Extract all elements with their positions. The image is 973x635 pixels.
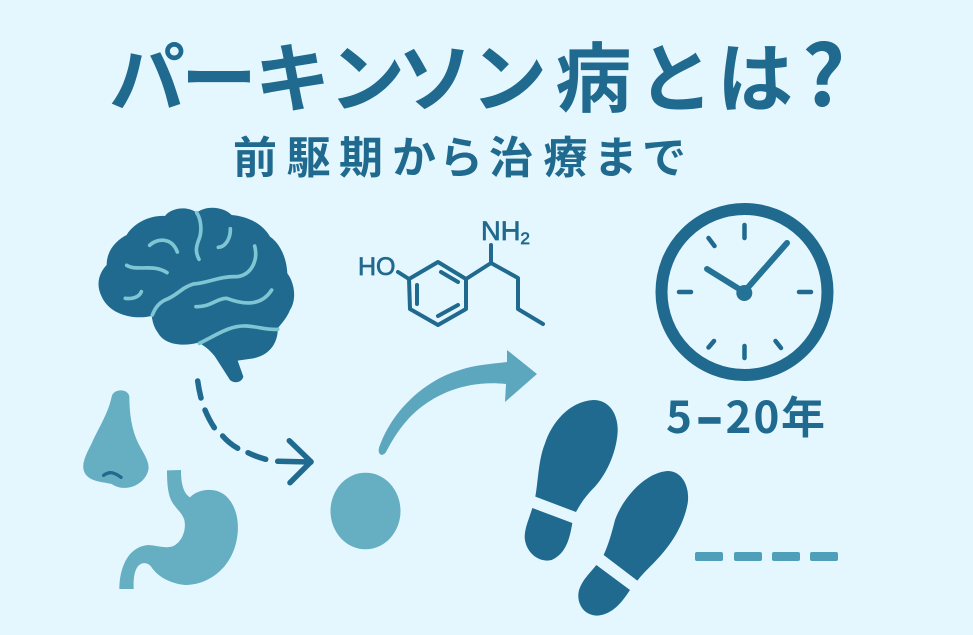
label: HO: HO [358, 253, 396, 281]
arrow: dashed curve from brain [198, 381, 311, 483]
title: ? [802, 10, 845, 131]
right heel [578, 565, 630, 616]
icon: footprints [525, 400, 688, 616]
title: パーキンソン 病とは [109, 18, 793, 128]
label: 5-20 years: 5–20年 [666, 382, 825, 446]
icon: brain [99, 208, 294, 382]
arrow: curved rising [379, 350, 537, 455]
circle: dopamine neuron [330, 473, 400, 549]
right sole [604, 471, 688, 581]
chemical structure [358, 216, 543, 325]
icon: stomach [119, 470, 238, 589]
icon: clock [662, 209, 828, 375]
label: NH2: 2 [520, 229, 530, 248]
icon: nose [83, 390, 149, 488]
dashed line [695, 552, 838, 561]
left sole [535, 400, 618, 512]
label: NH2: NH [481, 216, 520, 246]
subtitle: 前駆期から治療まで [233, 122, 686, 186]
left heel [525, 508, 572, 561]
